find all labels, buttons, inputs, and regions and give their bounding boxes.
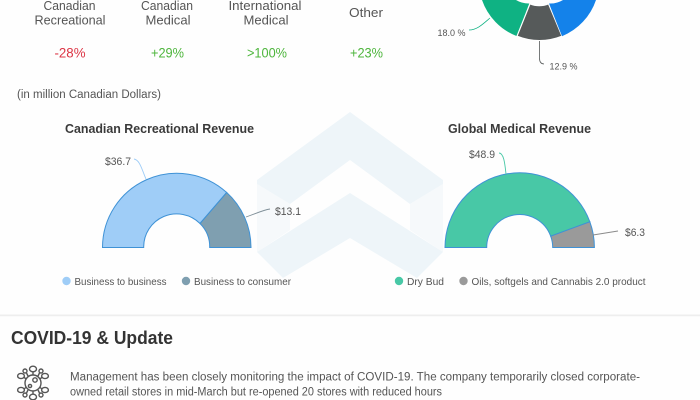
segment: Canadian Recreational (34, 0, 106, 60)
segment: Canadian Medical: Medical (146, 12, 191, 28)
panel: Global Medical Revenue (395, 121, 646, 288)
label: 12.9 % (540, 41, 578, 72)
units note: (in million Canadian Dollars) (17, 89, 161, 101)
value: $48.9: $48.9 (469, 149, 495, 161)
legend: Oils, softgels and Cannabis 2.0 product (472, 276, 646, 288)
label: 18.0 % (438, 18, 490, 39)
segment growth labels (34, 0, 384, 60)
segment: Canadian Medical: +29% (151, 46, 184, 60)
heading: Canadian Recreational Revenue (65, 121, 254, 136)
body text (70, 372, 640, 398)
legend (62, 276, 291, 288)
value: $36.7: $36.7 (105, 156, 131, 168)
panel: Canadian Recreational Revenue (62, 121, 301, 288)
value: $13.1 (246, 206, 301, 218)
segment: International Medical (228, 0, 302, 60)
segment: International Medical: >100% (247, 46, 287, 60)
section heading: COVID-19 & Update: COVID-19 & Update (11, 328, 173, 348)
segment: Other: +23% (350, 46, 383, 60)
label: 12.9 %: 12.9 % (550, 62, 578, 72)
segment: Other: Other (349, 5, 384, 20)
heading: Global Medical Revenue (448, 121, 591, 136)
value: $13.1: $13.1 (275, 206, 301, 218)
icon: virus (18, 366, 48, 400)
donut chart (438, 0, 596, 72)
segment: Canadian Medical (141, 0, 193, 60)
segment: Other (349, 5, 384, 60)
value: $36.7 (105, 156, 146, 179)
segment: Canadian Recreational: Recreational (34, 12, 106, 28)
body text: owned retail stores in mid-March but re-opened 20 stores with reduced hours (70, 386, 442, 398)
half donut chart (445, 173, 594, 248)
body text: Management has been closely monitoring the impact of COVID-19. The company temporarily closed corporate- (70, 372, 640, 384)
watermark logo (257, 112, 443, 278)
value: $6.3 (593, 227, 645, 239)
legend: Business to business (74, 276, 166, 288)
legend: Business to consumer (194, 276, 291, 288)
segment: Canadian Recreational: -28% (54, 46, 86, 60)
segment: International Medical: Medical (244, 12, 289, 28)
value: $6.3: $6.3 (625, 227, 645, 239)
legend: Dry Bud (407, 276, 444, 288)
half donut chart (102, 173, 251, 248)
value: $48.9 (469, 149, 506, 174)
legend (395, 276, 646, 288)
label: 18.0 %: 18.0 % (438, 28, 466, 39)
